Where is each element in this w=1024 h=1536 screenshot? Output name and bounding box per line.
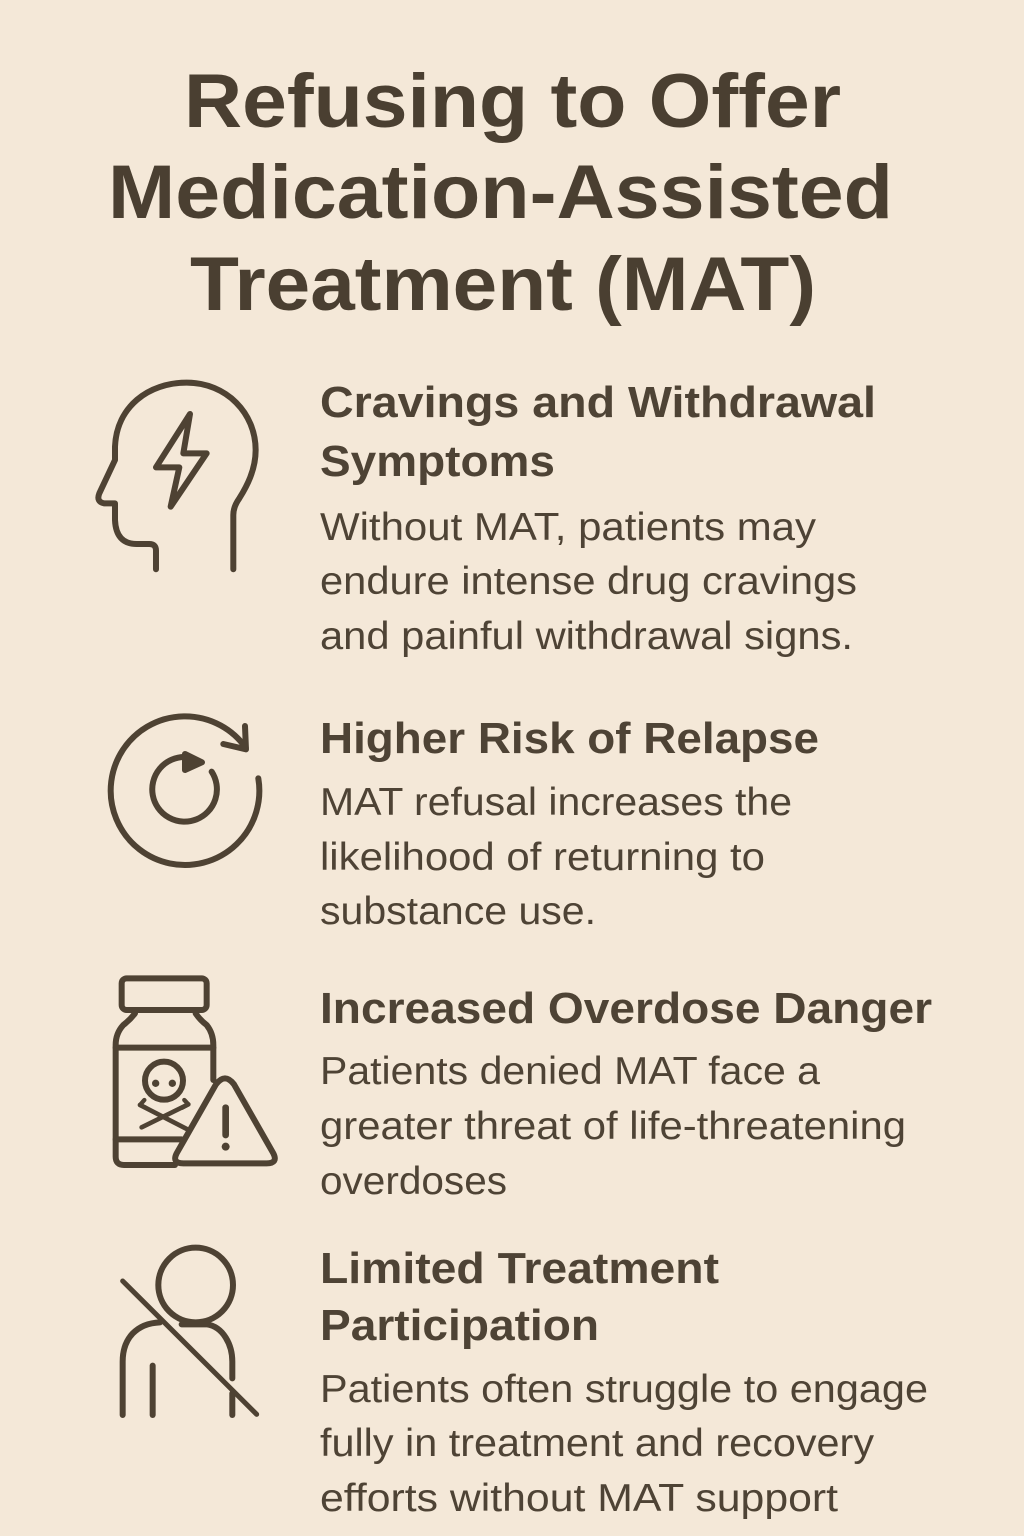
text: participation description: fully in treatment and recovery [320,1422,875,1465]
text: overdose description: Patients denied MAT face a [320,1050,820,1093]
text: cravings description [320,506,857,658]
title [108,59,893,327]
text: relapse description: MAT refusal increases the [320,781,792,824]
panel: relapse [111,714,819,933]
panel: participation [123,1244,928,1520]
text: overdose description: overdoses [320,1160,507,1203]
text: participation description: efforts without MAT support [320,1477,838,1520]
icon: circular arrows [111,716,259,865]
text: relapse description [320,781,792,933]
heading: cravings: Symptoms [320,437,555,486]
text: participation description [320,1368,928,1520]
text: relapse description: likelihood of returning to [320,836,765,879]
heading: participation: Participation [320,1301,599,1350]
text: overdose description [320,1050,906,1203]
text: relapse description: substance use. [320,890,596,933]
title: Treatment (MAT) [190,242,816,327]
heading: cravings [320,378,876,486]
icon: head with lightning bolt [98,383,256,569]
text: overdose description: greater threat of life-threatening [320,1105,906,1148]
icon: crossed-out person [123,1248,257,1415]
text: cravings description: Without MAT, patients may [320,506,817,549]
text: cravings description: endure intense drug cravings [320,560,857,603]
text: participation description: Patients often struggle to engage [320,1368,928,1411]
heading: cravings: Cravings and Withdrawal [320,378,876,427]
heading: relapse: Higher Risk of Relapse [320,714,819,763]
title: Refusing to Offer [184,59,841,144]
panel: overdose [116,978,932,1203]
heading: overdose: Increased Overdose Danger [320,984,932,1033]
text: cravings description: and painful withdrawal signs. [320,615,853,658]
title: Medication-Assisted [108,150,893,235]
heading: participation [320,1244,719,1350]
icon: poison bottle with warning triangle [116,978,275,1165]
panel: cravings and withdrawal [98,378,876,658]
heading: participation: Limited Treatment [320,1244,719,1293]
